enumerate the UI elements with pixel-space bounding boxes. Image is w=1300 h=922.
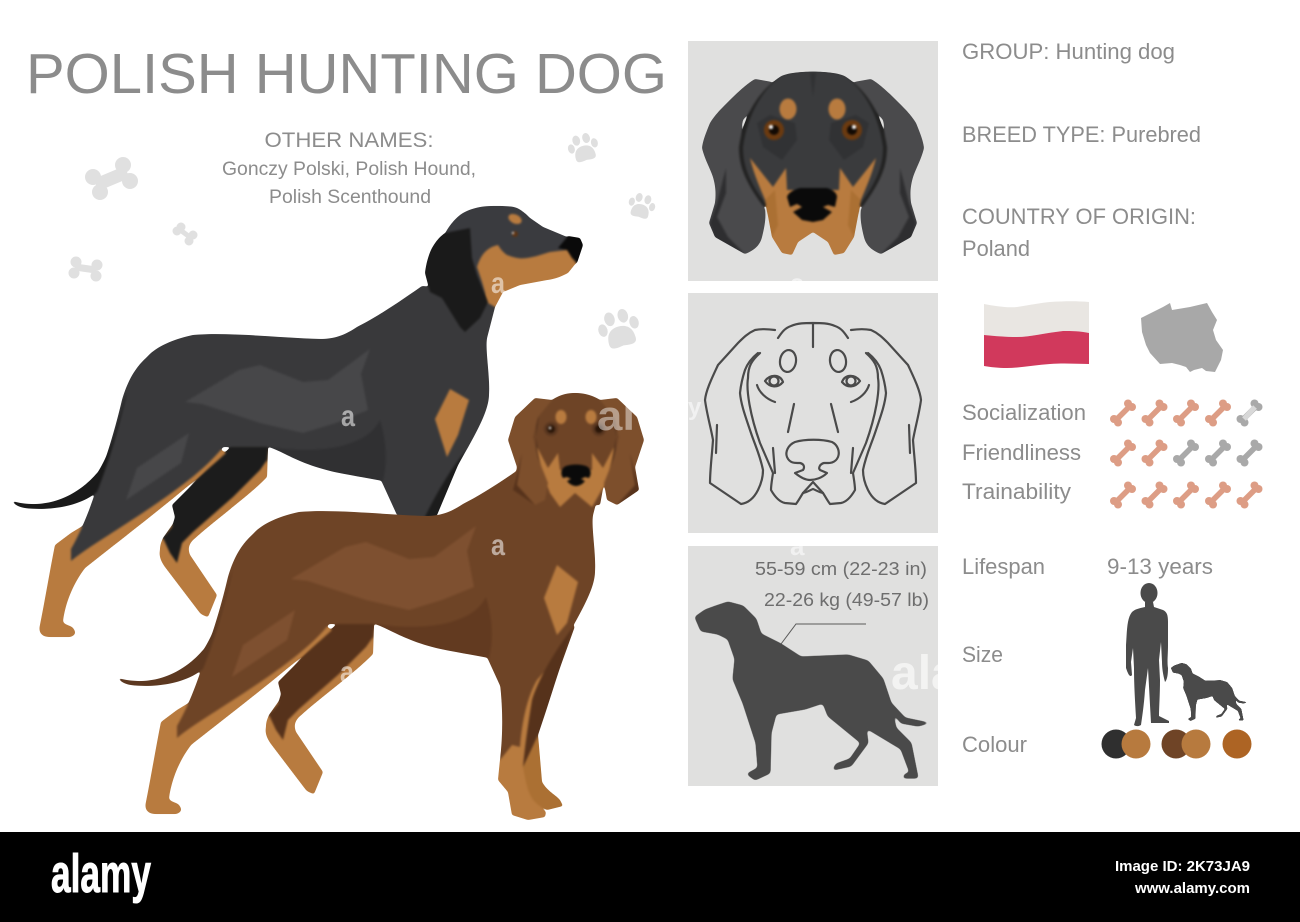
head: brown dog xyxy=(508,393,644,507)
Friendliness rating xyxy=(962,440,1262,466)
breed facts xyxy=(962,39,1201,261)
panel watermarks: a xyxy=(790,268,805,298)
other names text block: OTHER NAMES: xyxy=(264,129,434,152)
colour swatches: Colour xyxy=(962,732,1027,757)
breed facts: COUNTRY OF ORIGIN: xyxy=(962,204,1196,229)
footer bar xyxy=(0,832,1300,922)
watermark letters xyxy=(340,267,635,689)
Socialization rating xyxy=(962,400,1262,426)
watermark letters: a xyxy=(491,267,505,300)
front legs: brown dog xyxy=(490,626,575,820)
decorative bones and paws xyxy=(69,158,197,281)
lifespan: 9-13 years xyxy=(1107,554,1213,579)
head: black dog xyxy=(425,206,583,332)
face xyxy=(739,72,887,255)
panel: size silhouette xyxy=(688,546,938,786)
brown and tan dog xyxy=(118,393,644,820)
panel watermarks: ala xyxy=(891,647,958,700)
lifespan xyxy=(962,554,1213,579)
height label: 55-59 cm (22-23 in) xyxy=(755,559,927,579)
panel watermarks: a xyxy=(790,531,805,561)
dog silhouette xyxy=(695,602,929,780)
alamy logo: alamy xyxy=(51,844,151,904)
flag of Poland xyxy=(984,301,1089,368)
panel: head colour xyxy=(688,41,938,281)
watermark letters: a xyxy=(491,529,505,562)
watermark letters: a xyxy=(341,400,355,433)
Friendliness rating: Friendliness xyxy=(962,440,1081,465)
url: www.alamy.com xyxy=(1134,880,1250,897)
leader line xyxy=(781,624,866,644)
Trainability rating xyxy=(962,479,1262,508)
other names text block xyxy=(222,129,476,208)
watermark letters: al xyxy=(597,392,635,439)
panel watermarks xyxy=(688,268,958,700)
other names text block: Polish Scenthound xyxy=(269,187,431,208)
breed facts: GROUP: Hunting dog xyxy=(962,39,1175,64)
Trainability rating: Trainability xyxy=(962,479,1072,504)
lifespan: Lifespan xyxy=(962,554,1045,579)
panel: head line drawing xyxy=(688,293,938,533)
weight label: 22-26 kg (49-57 lb) xyxy=(764,590,929,610)
small dog silhouette xyxy=(1171,663,1247,721)
other names text block: Gonczy Polski, Polish Hound, xyxy=(222,159,476,180)
watermark letters: a xyxy=(340,656,354,689)
human silhouette xyxy=(1126,583,1169,726)
head artwork xyxy=(702,72,924,255)
ratings xyxy=(962,400,1262,508)
black and tan dog xyxy=(12,206,583,637)
image id: Image ID: 2K73JA9 xyxy=(1115,858,1250,875)
breed facts: BREED TYPE: Purebred xyxy=(962,122,1201,147)
panel watermarks: y xyxy=(688,394,702,421)
title: POLISH HUNTING DOG xyxy=(26,42,667,106)
size comparison xyxy=(962,583,1247,726)
ears xyxy=(702,79,924,254)
map of Poland xyxy=(1141,303,1223,372)
colour swatches xyxy=(962,730,1252,758)
Socialization rating: Socialization xyxy=(962,400,1086,425)
breed facts: Poland xyxy=(962,236,1030,261)
size comparison: Size xyxy=(962,642,1003,667)
